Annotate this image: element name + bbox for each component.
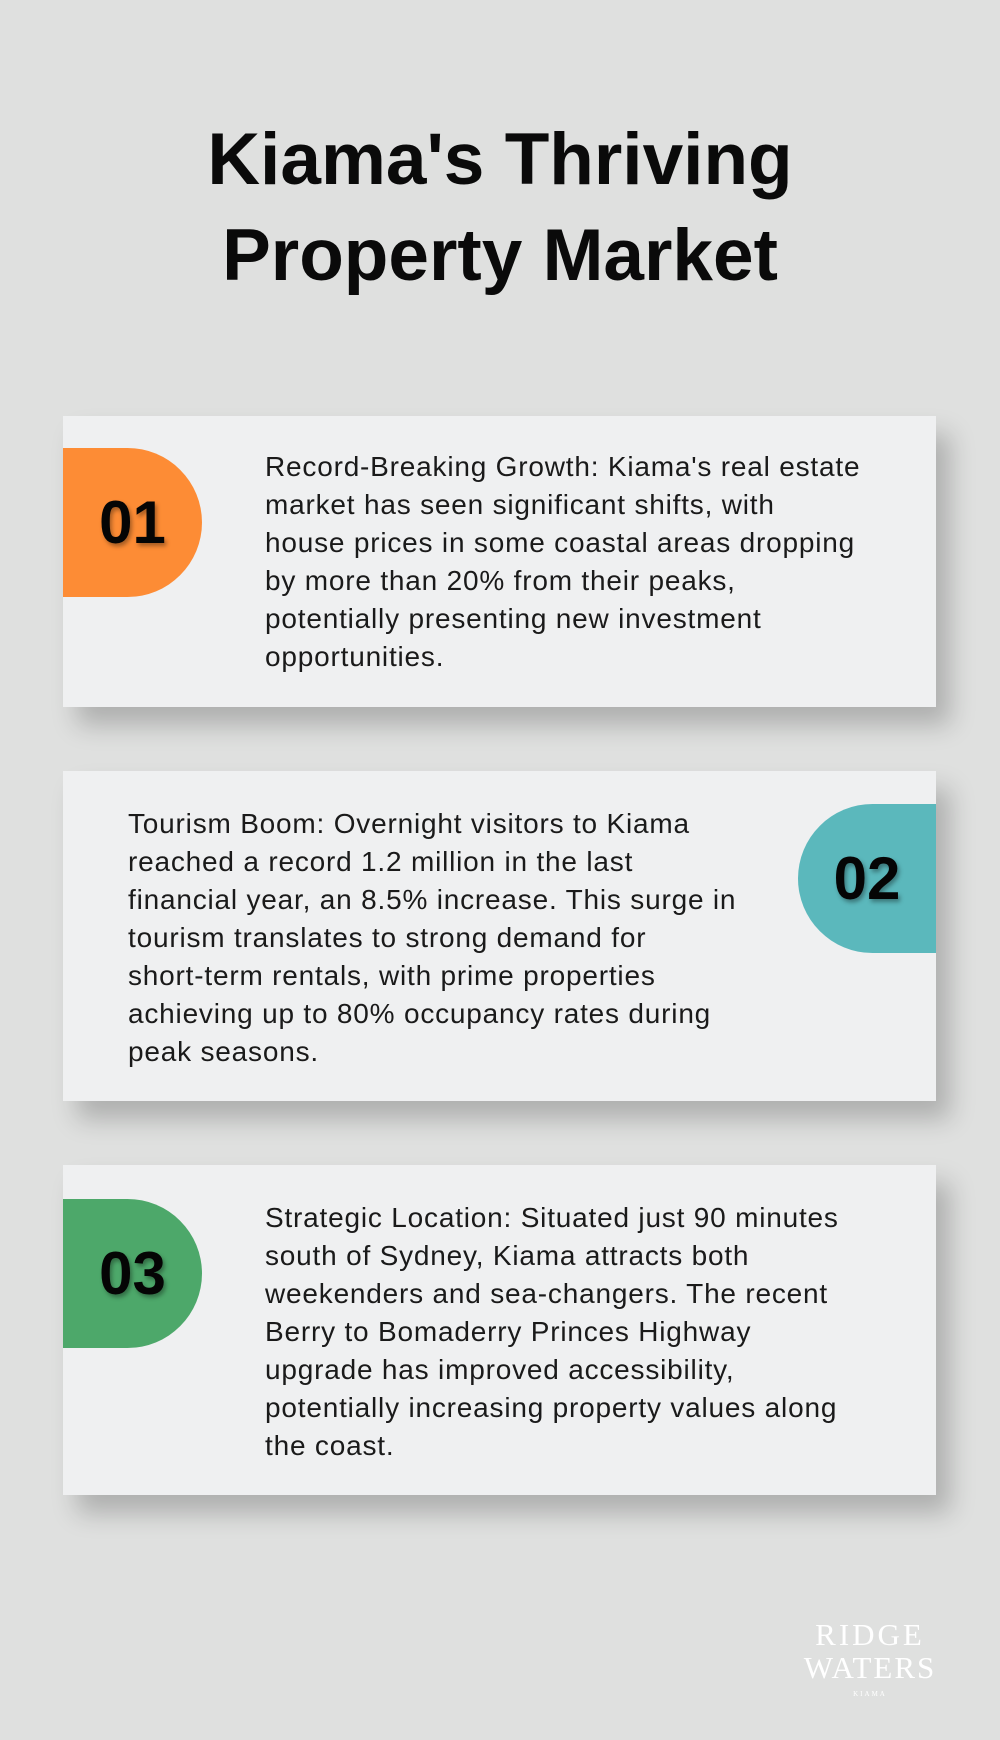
text: tourism boom: short-term rentals, with prime properties: [128, 960, 656, 991]
badge 03: 03: [99, 1240, 166, 1307]
text: record-breaking growth: [265, 451, 860, 672]
title: [207, 119, 793, 296]
badge 01: [63, 448, 202, 597]
text: record-breaking growth: potentially presenting new investment: [265, 603, 762, 634]
text: tourism boom: peak seasons.: [128, 1036, 319, 1067]
text: record-breaking growth: house prices in some coastal areas dropping: [265, 527, 855, 558]
text: strategic location: [265, 1202, 839, 1461]
title: Kiama's Thriving: [207, 119, 793, 200]
panel: card 02: [63, 771, 936, 1101]
text: tourism boom: reached a record 1.2 million in the last: [128, 846, 633, 877]
text: tourism boom: achieving up to 80% occupancy rates during: [128, 998, 711, 1029]
logo: Ridge Waters: WATERS: [804, 1650, 936, 1685]
text: record-breaking growth: market has seen significant shifts, with: [265, 489, 775, 520]
text: strategic location: Berry to Bomaderry Princes Highway: [265, 1316, 751, 1347]
text: record-breaking growth: by more than 20% from their peaks,: [265, 565, 736, 596]
panel: card 01: [63, 416, 936, 707]
badge 03: [63, 1199, 202, 1348]
logo: Ridge Waters: KIAMA: [853, 1690, 887, 1698]
logo: Ridge Waters: [804, 1617, 936, 1698]
title: Property Market: [222, 215, 778, 296]
text: tourism boom: [128, 808, 736, 1067]
text: tourism boom: tourism translates to strong demand for: [128, 922, 646, 953]
text: strategic location: weekenders and sea-changers. The recent: [265, 1278, 828, 1309]
text: strategic location: Strategic Location: Situated just 90 minutes: [265, 1202, 839, 1233]
text: record-breaking growth: opportunities.: [265, 641, 444, 672]
text: tourism boom: Tourism Boom: Overnight visitors to Kiama: [128, 808, 690, 839]
badge 02: 02: [834, 845, 900, 912]
text: strategic location: south of Sydney, Kiama attracts both: [265, 1240, 749, 1271]
text: strategic location: potentially increasing property values along: [265, 1392, 837, 1423]
panel: card 03: [63, 1165, 936, 1495]
text: strategic location: the coast.: [265, 1430, 394, 1461]
text: record-breaking growth: Record-Breaking Growth: Kiama's real estate: [265, 451, 860, 482]
badge 02: [798, 804, 936, 953]
logo: Ridge Waters: RIDGE: [815, 1617, 925, 1652]
badge 01: 01: [99, 489, 166, 556]
text: strategic location: upgrade has improved accessibility,: [265, 1354, 734, 1385]
text: tourism boom: financial year, an 8.5% increase. This surge in: [128, 884, 736, 915]
